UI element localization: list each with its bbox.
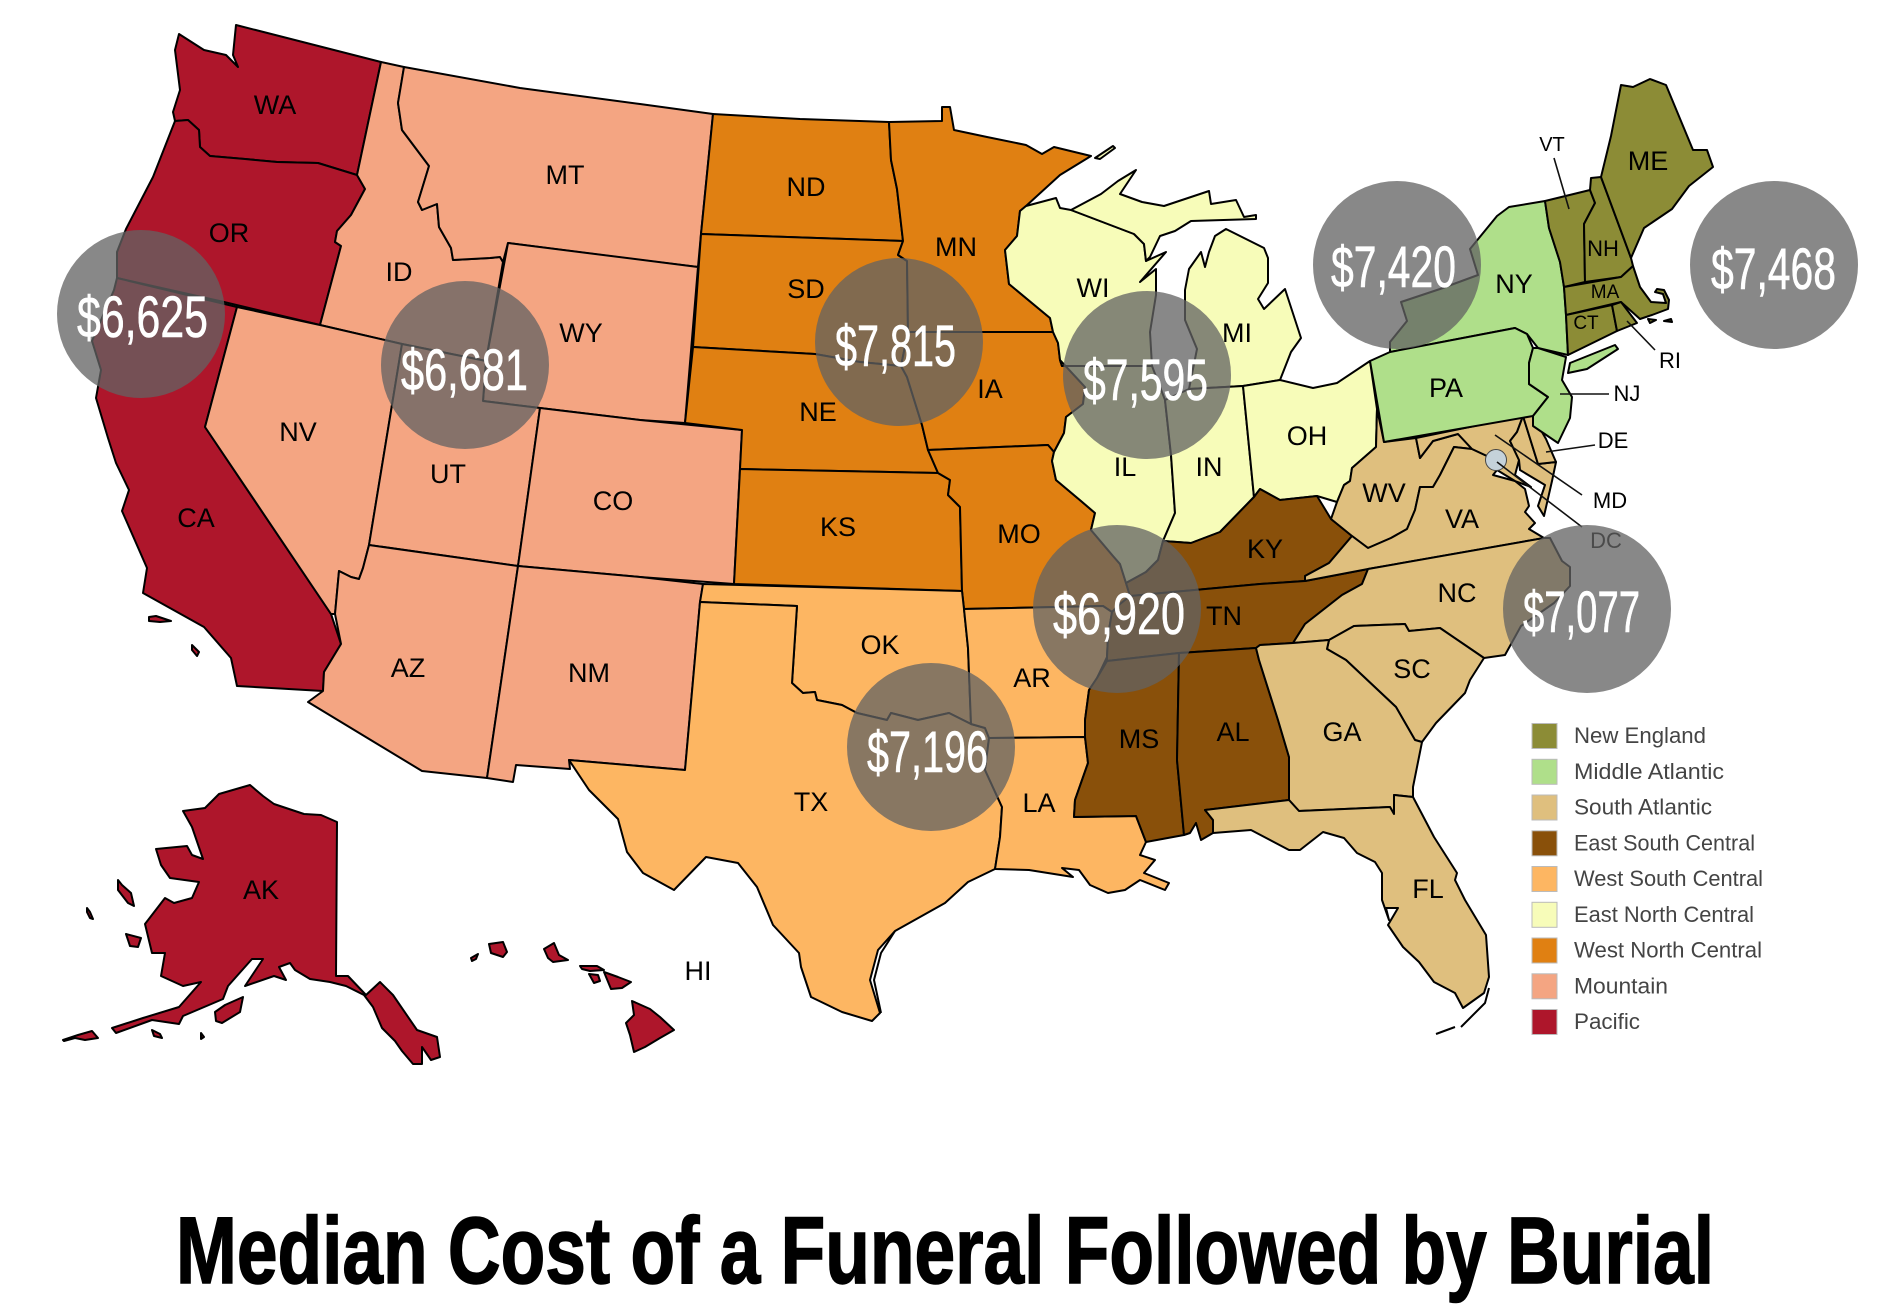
state abbreviation labels: MS [1119, 724, 1159, 754]
state: Maryland eastern shore [1510, 416, 1556, 516]
state: Louisiana [985, 737, 1169, 893]
state: Connecticut [1566, 305, 1617, 355]
callout: South Atlantic median cost [1503, 525, 1671, 693]
callout: New England median cost [1690, 181, 1858, 349]
legend item: Mountain [1532, 974, 1668, 999]
state: Florida [1205, 795, 1489, 1008]
state: Utah [369, 344, 540, 566]
region: East North Central states [1005, 146, 1377, 583]
legend item: West South Central: West South Central [1574, 866, 1763, 891]
state: Texas [569, 602, 1002, 1021]
state: Alaska [112, 785, 440, 1064]
state: New Mexico [487, 566, 703, 782]
state: North Dakota [701, 114, 903, 241]
state: Wisconsin [1005, 198, 1166, 366]
region: Mountain states [205, 62, 742, 782]
state abbreviation labels: NH [1587, 236, 1619, 261]
state abbreviation labels: OH [1287, 421, 1327, 451]
state: Mississippi [1074, 653, 1184, 842]
state: Oregon [117, 120, 365, 325]
callout: East North Central median cost: $7,595 [1083, 348, 1208, 413]
state abbreviation labels: NE [799, 397, 837, 427]
state: Washington [173, 25, 381, 175]
state: Pennsylvania [1370, 328, 1548, 442]
callout: Mountain median cost: $6,681 [401, 338, 528, 403]
state: Nevada [205, 307, 402, 614]
state abbreviation labels: SC [1393, 654, 1431, 684]
state abbreviation labels: MA [1591, 282, 1620, 303]
state abbreviation labels: WA [254, 90, 296, 120]
state: Colorado [518, 408, 742, 584]
state abbreviation labels: CO [593, 486, 633, 516]
callout: West South Central median cost: $7,196 [867, 720, 988, 785]
state abbreviation labels: ME [1628, 146, 1668, 176]
state abbreviation labels: IL [1114, 452, 1136, 482]
state abbreviation labels: FL [1412, 874, 1444, 904]
legend item: Pacific [1532, 1009, 1640, 1034]
state: North Carolina [1293, 538, 1570, 658]
state: Rhode Island [1612, 302, 1637, 331]
state abbreviation labels: MD [1593, 488, 1627, 513]
state: Arkansas [964, 606, 1112, 738]
state: Idaho [320, 62, 503, 361]
leader lines for small state labels [1495, 158, 1655, 527]
state abbreviation labels: UT [430, 459, 466, 489]
state: Arizona [308, 545, 518, 778]
state abbreviation labels: AZ [391, 653, 425, 683]
state abbreviation labels: DE [1598, 428, 1628, 453]
callout: East North Central median cost [1063, 291, 1231, 459]
shape: Texas barrier island [874, 931, 895, 1013]
state: South Carolina [1327, 624, 1484, 742]
state abbreviation labels: WV [1362, 478, 1406, 508]
legend item: Pacific: Pacific [1574, 1009, 1640, 1034]
callout: Pacific median cost [57, 230, 225, 398]
state: Oklahoma [700, 584, 971, 724]
shape: Alaska islands [63, 880, 243, 1041]
state: Kansas [734, 469, 962, 591]
callout: East South Central median cost [1033, 525, 1201, 693]
state abbreviation labels: NJ [1614, 381, 1640, 406]
state abbreviation labels: IN [1196, 452, 1222, 482]
state: Vermont [1545, 190, 1595, 287]
state: Missouri [928, 445, 1130, 612]
state abbreviation labels: NM [568, 658, 610, 688]
region: West South Central states [569, 584, 1169, 1021]
region: South Atlantic states [1205, 409, 1570, 1034]
legend item: New England: New England [1574, 723, 1706, 748]
state: Michigan lower peninsula [1185, 229, 1301, 389]
state abbreviation labels: NY [1495, 269, 1533, 299]
state abbreviation labels: WI [1076, 273, 1110, 303]
state abbreviation labels: PA [1429, 373, 1463, 403]
state: Delaware [1523, 413, 1556, 464]
shape: California islands [149, 616, 199, 656]
state abbreviation labels: IA [977, 374, 1003, 404]
callout: East South Central median cost: $6,920 [1053, 582, 1185, 647]
state: Kentucky [1126, 489, 1352, 596]
state: Georgia [1256, 640, 1422, 814]
state abbreviation labels: MT [546, 160, 584, 190]
region: Pacific states [63, 25, 674, 1064]
state abbreviation labels: GA [1322, 717, 1362, 747]
region: New England states [1545, 79, 1713, 355]
shape: Isle Royale [1095, 146, 1115, 159]
callout: West North Central median cost [815, 258, 983, 426]
state: Montana [398, 67, 713, 267]
state abbreviation labels: DC [1590, 528, 1622, 553]
state: Wyoming [483, 243, 698, 423]
legend item: East North Central: East North Central [1574, 902, 1754, 927]
state abbreviation labels: MN [935, 232, 977, 262]
state: Maryland [1416, 416, 1531, 487]
state abbreviation labels: AL [1216, 717, 1250, 747]
state abbreviation labels: AK [243, 875, 279, 905]
state: Massachusetts [1564, 266, 1669, 319]
state: Alabama [1177, 648, 1289, 840]
callout: Middle Atlantic median cost: $7,420 [1331, 235, 1456, 300]
state: Minnesota [889, 107, 1091, 332]
state abbreviation labels: KY [1247, 534, 1283, 564]
callout: Mountain median cost [381, 281, 549, 449]
state abbreviation labels: HI [684, 956, 712, 986]
state: California [92, 278, 341, 691]
region: West North Central states [685, 107, 1130, 612]
legend item: South Atlantic: South Atlantic [1574, 794, 1712, 820]
region: East South Central states [1074, 489, 1368, 842]
state abbreviation labels: LA [1022, 788, 1056, 818]
state abbreviation labels: MO [997, 519, 1041, 549]
legend item: Middle Atlantic: Middle Atlantic [1574, 759, 1724, 784]
legend [1532, 723, 1763, 1034]
shape: Massachusetts islands [1648, 319, 1672, 323]
state: New Hampshire [1584, 177, 1633, 282]
state: Michigan upper peninsula [1071, 170, 1256, 261]
shape: Florida Keys [1436, 988, 1489, 1034]
state abbreviation labels: TN [1206, 601, 1242, 631]
state abbreviation labels: NC [1438, 578, 1476, 608]
state: Iowa [901, 332, 1085, 452]
state abbreviation labels: CT [1573, 313, 1599, 334]
legend item: Mountain: Mountain [1574, 974, 1668, 998]
state: Long Island [1568, 345, 1618, 373]
state abbreviation labels: VT [1539, 134, 1565, 156]
state: Ohio [1243, 361, 1377, 502]
legend item: West North Central: West North Central [1574, 938, 1762, 962]
state: New York [1390, 201, 1568, 355]
region: Middle Atlantic states [1370, 201, 1618, 443]
icon: Washington DC marker [1486, 450, 1506, 470]
state abbreviation labels: KS [820, 512, 856, 542]
callout: West South Central median cost [847, 663, 1015, 831]
state abbreviation labels: SD [787, 274, 825, 304]
state: Virginia [1305, 447, 1544, 581]
state abbreviation labels: OR [209, 218, 249, 248]
legend item: East South Central: East South Central [1574, 830, 1755, 856]
state abbreviation labels: NV [279, 417, 317, 447]
state abbreviation labels: ND [786, 172, 826, 202]
state abbreviation labels: ID [386, 257, 412, 287]
state abbreviation labels: MI [1222, 318, 1252, 348]
state abbreviation labels: CA [177, 503, 215, 533]
state abbreviation labels: VA [1445, 504, 1479, 534]
callout: West North Central median cost: $7,815 [835, 314, 956, 379]
callout: Middle Atlantic median cost [1313, 181, 1481, 349]
state abbreviation labels [177, 90, 1681, 986]
state: Illinois [1052, 360, 1175, 583]
state: New Jersey [1529, 348, 1572, 443]
callout: New England median cost: $7,468 [1711, 237, 1836, 302]
state: Hawaii [471, 942, 674, 1052]
state abbreviation labels: WY [559, 318, 603, 348]
state: Tennessee [1107, 569, 1368, 661]
state: West Virginia [1331, 409, 1472, 548]
state abbreviation labels: RI [1659, 348, 1681, 373]
state abbreviation labels: OK [860, 630, 900, 660]
state abbreviation labels: TX [794, 787, 828, 817]
state: Indiana [1163, 386, 1254, 543]
state: South Dakota [693, 234, 908, 366]
state abbreviation labels: AR [1013, 663, 1051, 693]
callout: South Atlantic median cost: $7,077 [1523, 580, 1640, 645]
state: Nebraska [685, 347, 938, 473]
callout: Pacific median cost: $6,625 [77, 285, 208, 350]
state: Maine [1601, 79, 1713, 258]
